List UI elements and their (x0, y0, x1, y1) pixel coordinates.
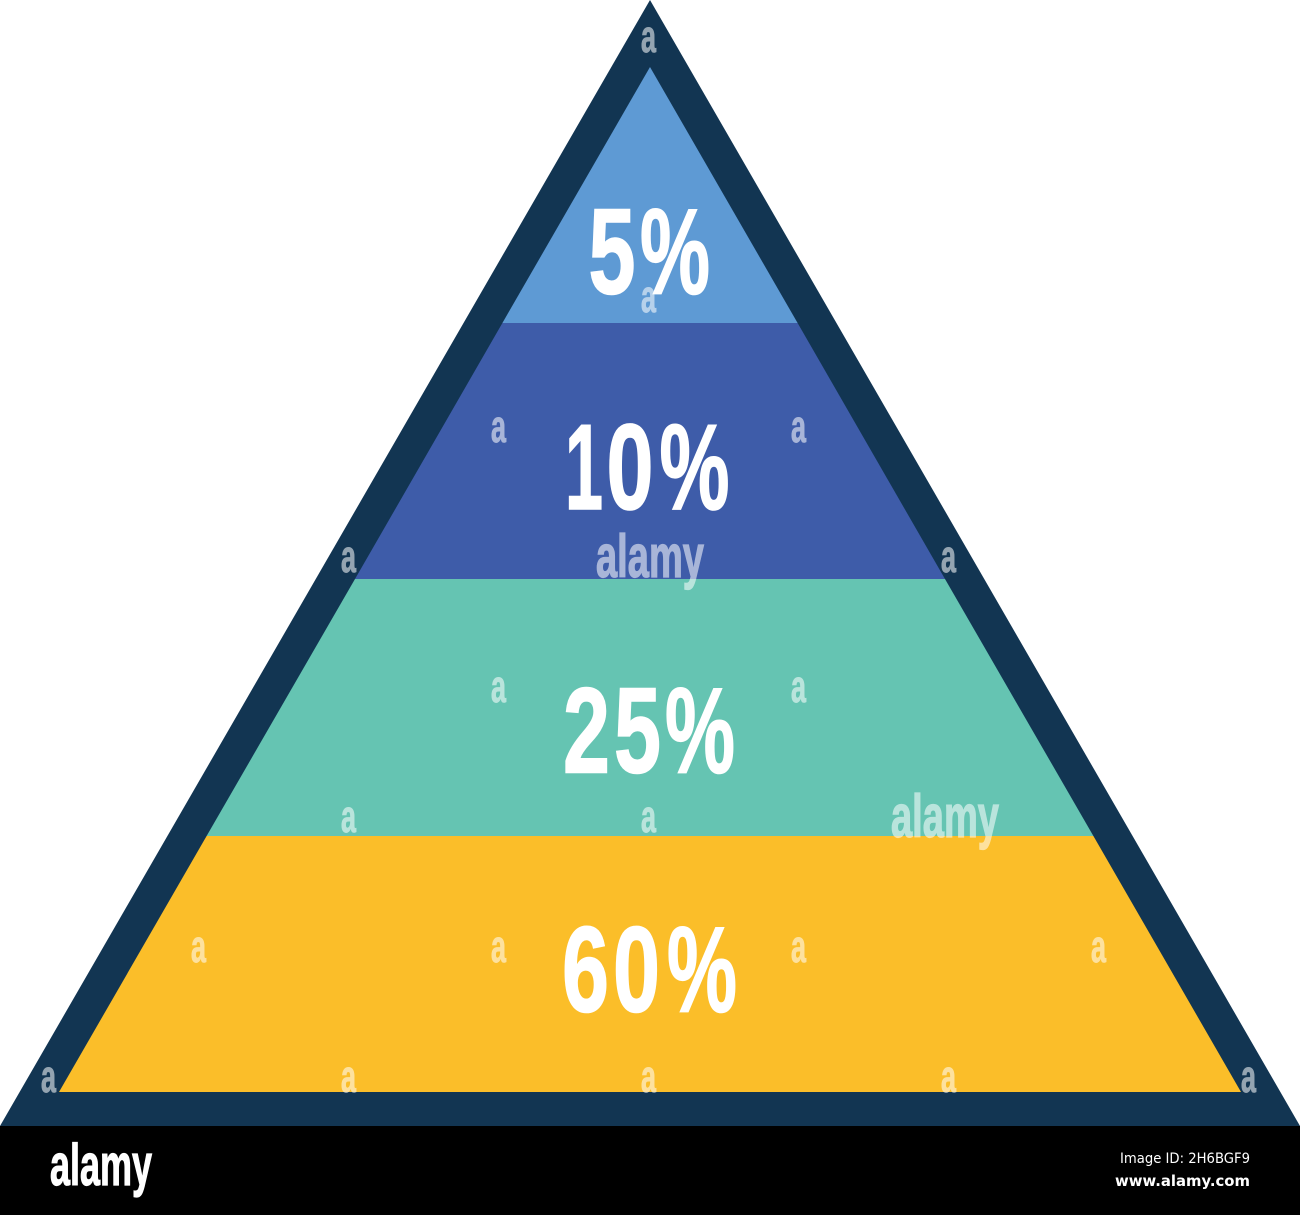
footer bar (0, 1126, 1300, 1215)
watermark overlay: a (791, 401, 807, 452)
watermark overlay: a (641, 791, 657, 842)
watermark overlay: alamy (891, 783, 999, 850)
watermark overlay: a (491, 661, 507, 712)
footer logo: alamy (50, 1133, 152, 1198)
watermark overlay: a (941, 531, 957, 582)
watermark overlay: a (491, 921, 507, 972)
tier: 60%: 6 (562, 902, 609, 1038)
tier: 10%: % (660, 399, 730, 535)
tier: 10%: 0 (606, 399, 654, 535)
footer image id: Image ID: 2H6BGF9 (1120, 1151, 1250, 1167)
watermark overlay: a (41, 1051, 57, 1102)
watermark overlay: a (641, 1051, 657, 1102)
tier: 25%: 2 (563, 662, 610, 798)
tier: 10%: 1 (565, 399, 603, 535)
tier: 10% (355, 323, 945, 579)
footer website: www.alamy.com (1115, 1172, 1250, 1190)
watermark overlay: a (491, 401, 507, 452)
watermark overlay: alamy (596, 523, 704, 590)
tier: 25%: % (665, 662, 735, 798)
watermark overlay: a (641, 271, 657, 322)
watermark overlay: a (191, 921, 207, 972)
tier: 25% (207, 579, 1093, 836)
watermark overlay: a (341, 1051, 357, 1102)
tier: 5%: 5 (588, 184, 636, 320)
watermark overlay: a (791, 661, 807, 712)
tier: 60% (59, 836, 1241, 1092)
tier: 5% (502, 67, 798, 323)
tier: 5%: % (640, 184, 710, 320)
tier: 25%: 5 (614, 662, 661, 798)
tier: 60%: % (667, 902, 737, 1038)
watermark overlay: a (791, 921, 807, 972)
tier: 60%: 0 (613, 902, 660, 1038)
watermark overlay: a (1091, 921, 1107, 972)
watermark overlay: a (641, 11, 657, 62)
watermark overlay: a (1241, 1051, 1257, 1102)
watermark overlay: a (941, 1051, 957, 1102)
watermark overlay: a (341, 791, 357, 842)
watermark overlay: a (341, 531, 357, 582)
